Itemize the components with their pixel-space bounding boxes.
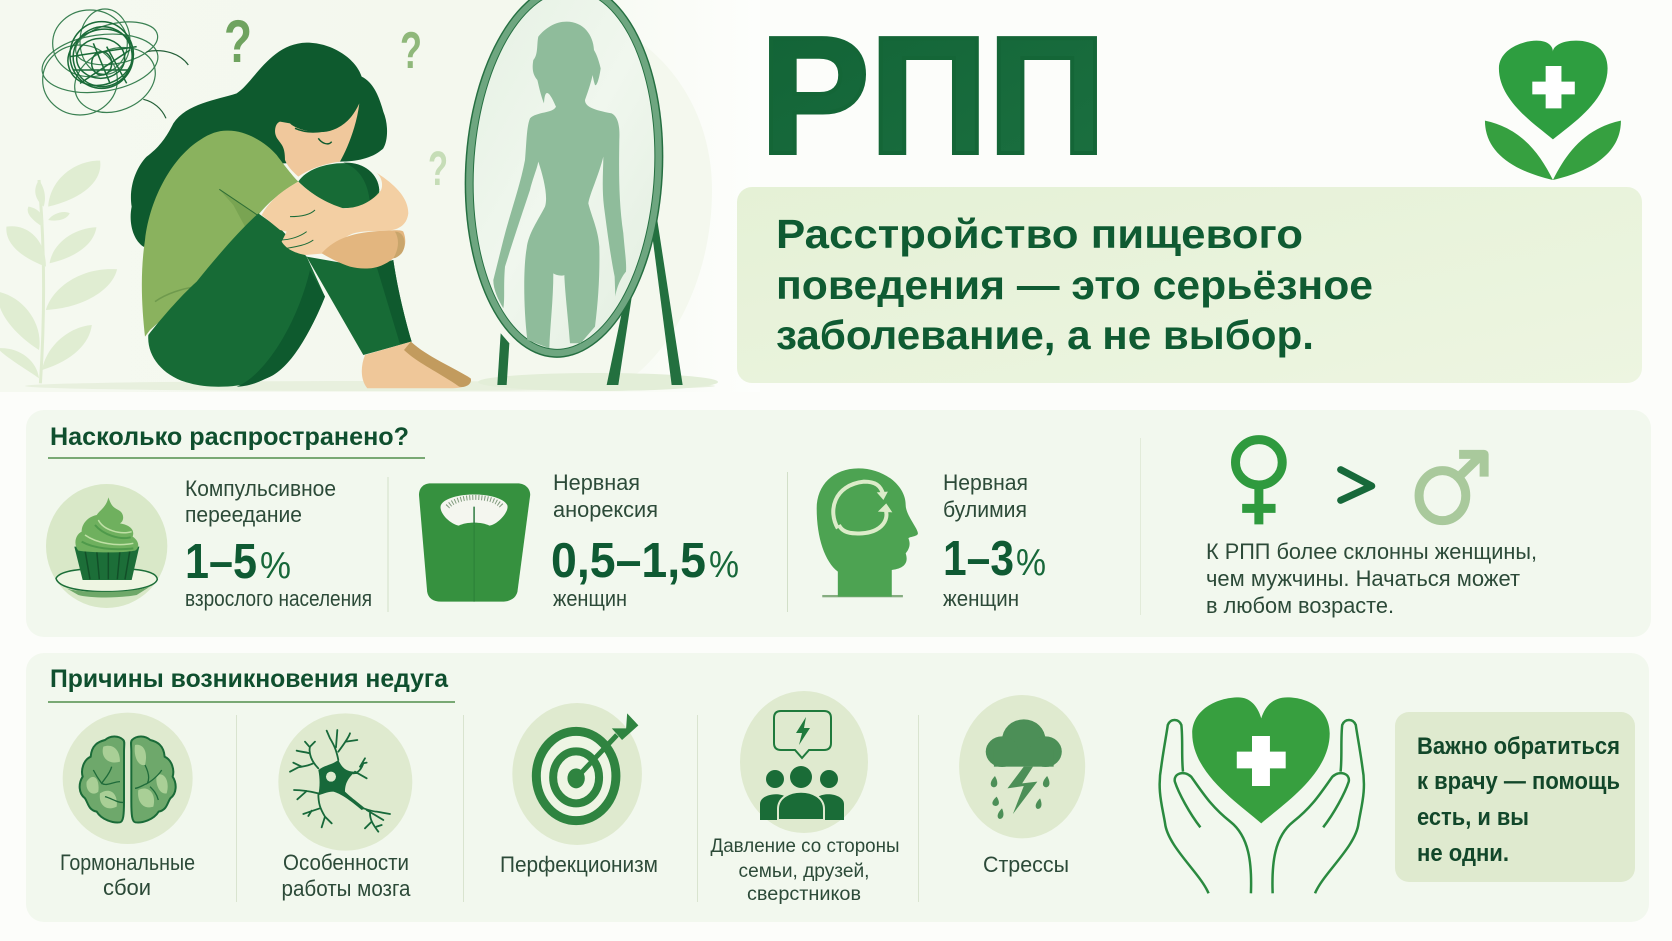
stat: anorexia: % bbox=[709, 544, 739, 586]
callout: see a doctor: к врачу — помощь bbox=[1417, 768, 1620, 795]
question marks: ? bbox=[400, 22, 422, 80]
stat: compulsive overeating: взрослого населения bbox=[185, 586, 372, 611]
callout: see a doctor: не одни. bbox=[1417, 840, 1509, 867]
stat: anorexia bbox=[551, 470, 739, 611]
definition text: Расстройство пищевого bbox=[776, 211, 1303, 257]
label: social pressure: Давление со стороны bbox=[710, 836, 900, 857]
label: brain features: Особенности bbox=[283, 850, 409, 875]
trousers: thigh and hip bbox=[148, 213, 325, 387]
scribble bbox=[38, 9, 188, 124]
icon: brain bbox=[63, 713, 193, 844]
label: perfectionism: Перфекционизм bbox=[500, 852, 658, 877]
label: hormones bbox=[60, 850, 195, 900]
stat: anorexia: 0,5–1,5 bbox=[551, 534, 706, 588]
trousers: shin bbox=[307, 257, 412, 355]
stat: bulimia: Нервная bbox=[943, 470, 1028, 495]
label: social pressure: сверстников bbox=[747, 884, 861, 905]
feet bbox=[362, 342, 471, 388]
label: hormones: сбои bbox=[103, 875, 151, 900]
icon: neuron bbox=[278, 713, 412, 851]
question marks bbox=[224, 8, 448, 196]
icon: female greater than male bbox=[1236, 440, 1484, 524]
hero illustration bbox=[0, 0, 718, 391]
question marks: ? bbox=[428, 143, 448, 196]
female symbol bbox=[1236, 440, 1282, 524]
label: brain features bbox=[282, 850, 411, 901]
callout: see a doctor: Важно обратиться bbox=[1417, 733, 1620, 760]
icon: target bbox=[512, 703, 642, 845]
title: РПП bbox=[760, 3, 1106, 189]
stat: bulimia: 1–3 bbox=[943, 532, 1014, 586]
callout: see a doctor bbox=[1395, 712, 1635, 882]
reflection silhouette bbox=[493, 22, 626, 348]
shirt bbox=[142, 131, 298, 337]
knee bbox=[298, 163, 379, 208]
panel: prevalence bbox=[26, 410, 1651, 637]
stat: bulimia: женщин bbox=[943, 586, 1019, 611]
icon: social pressure bbox=[740, 691, 868, 833]
stat: anorexia: анорексия bbox=[553, 497, 658, 522]
gender note: чем мужчины. Начаться может bbox=[1206, 566, 1520, 591]
heading: prevalence: Насколько распространено? bbox=[50, 423, 409, 451]
label: brain features: работы мозга bbox=[282, 876, 411, 901]
panel: causes bbox=[26, 653, 1649, 922]
face bbox=[275, 103, 359, 177]
mirror frame and glass bbox=[455, 0, 673, 363]
fingers bbox=[280, 210, 315, 248]
stat: compulsive overeating: Компульсивное bbox=[185, 476, 336, 501]
icon: head with cycle arrows bbox=[817, 468, 918, 597]
icon: hands holding heart bbox=[1160, 697, 1364, 893]
stat: compulsive overeating bbox=[185, 476, 372, 611]
stat: bulimia: булимия bbox=[943, 497, 1027, 522]
icon: storm cloud bbox=[959, 695, 1085, 838]
definition text bbox=[776, 211, 1373, 358]
stat: anorexia: Нервная bbox=[553, 470, 640, 495]
mirror stand bbox=[497, 216, 683, 385]
hero background bbox=[0, 0, 760, 392]
knee underside bbox=[322, 230, 405, 269]
callout: see a doctor: есть, и вы bbox=[1417, 804, 1529, 831]
definition text: поведения — это серьёзное bbox=[776, 262, 1373, 308]
gender note bbox=[1206, 539, 1537, 618]
decorative plant bbox=[0, 161, 117, 383]
definition card bbox=[737, 187, 1642, 383]
woman sitting bbox=[131, 43, 412, 387]
question marks: ? bbox=[224, 8, 252, 75]
gender note: в любом возрасте. bbox=[1206, 593, 1394, 618]
stat: bulimia: % bbox=[1016, 542, 1046, 584]
mirror bbox=[455, 0, 683, 385]
stat: compulsive overeating: 1–5 bbox=[185, 535, 257, 589]
icon: scale bbox=[419, 483, 530, 602]
label: hormones: Гормональные bbox=[60, 850, 195, 875]
label: social pressure bbox=[710, 836, 900, 905]
definition text: заболевание, а не выбор. bbox=[776, 312, 1314, 358]
male symbol bbox=[1419, 454, 1484, 521]
heading: causes: Причины возникновения недуга bbox=[50, 665, 449, 693]
icon: cupcake bbox=[46, 484, 167, 608]
label: stress: Стрессы bbox=[983, 852, 1069, 877]
label: social pressure: семьи, друзей, bbox=[738, 861, 870, 882]
floor shadow bbox=[25, 373, 718, 391]
stat: compulsive overeating: переедание bbox=[185, 502, 302, 527]
arm and hand bbox=[262, 172, 408, 255]
stat: bulimia bbox=[943, 470, 1046, 611]
gender note: К РПП более склонны женщины, bbox=[1206, 539, 1537, 564]
hair bbox=[131, 43, 387, 253]
stat: compulsive overeating: % bbox=[260, 545, 291, 587]
stat: anorexia: женщин bbox=[553, 586, 627, 611]
icon: heart with leaves bbox=[1485, 41, 1621, 180]
eye bbox=[318, 138, 332, 144]
greater-than sign bbox=[1341, 470, 1372, 500]
